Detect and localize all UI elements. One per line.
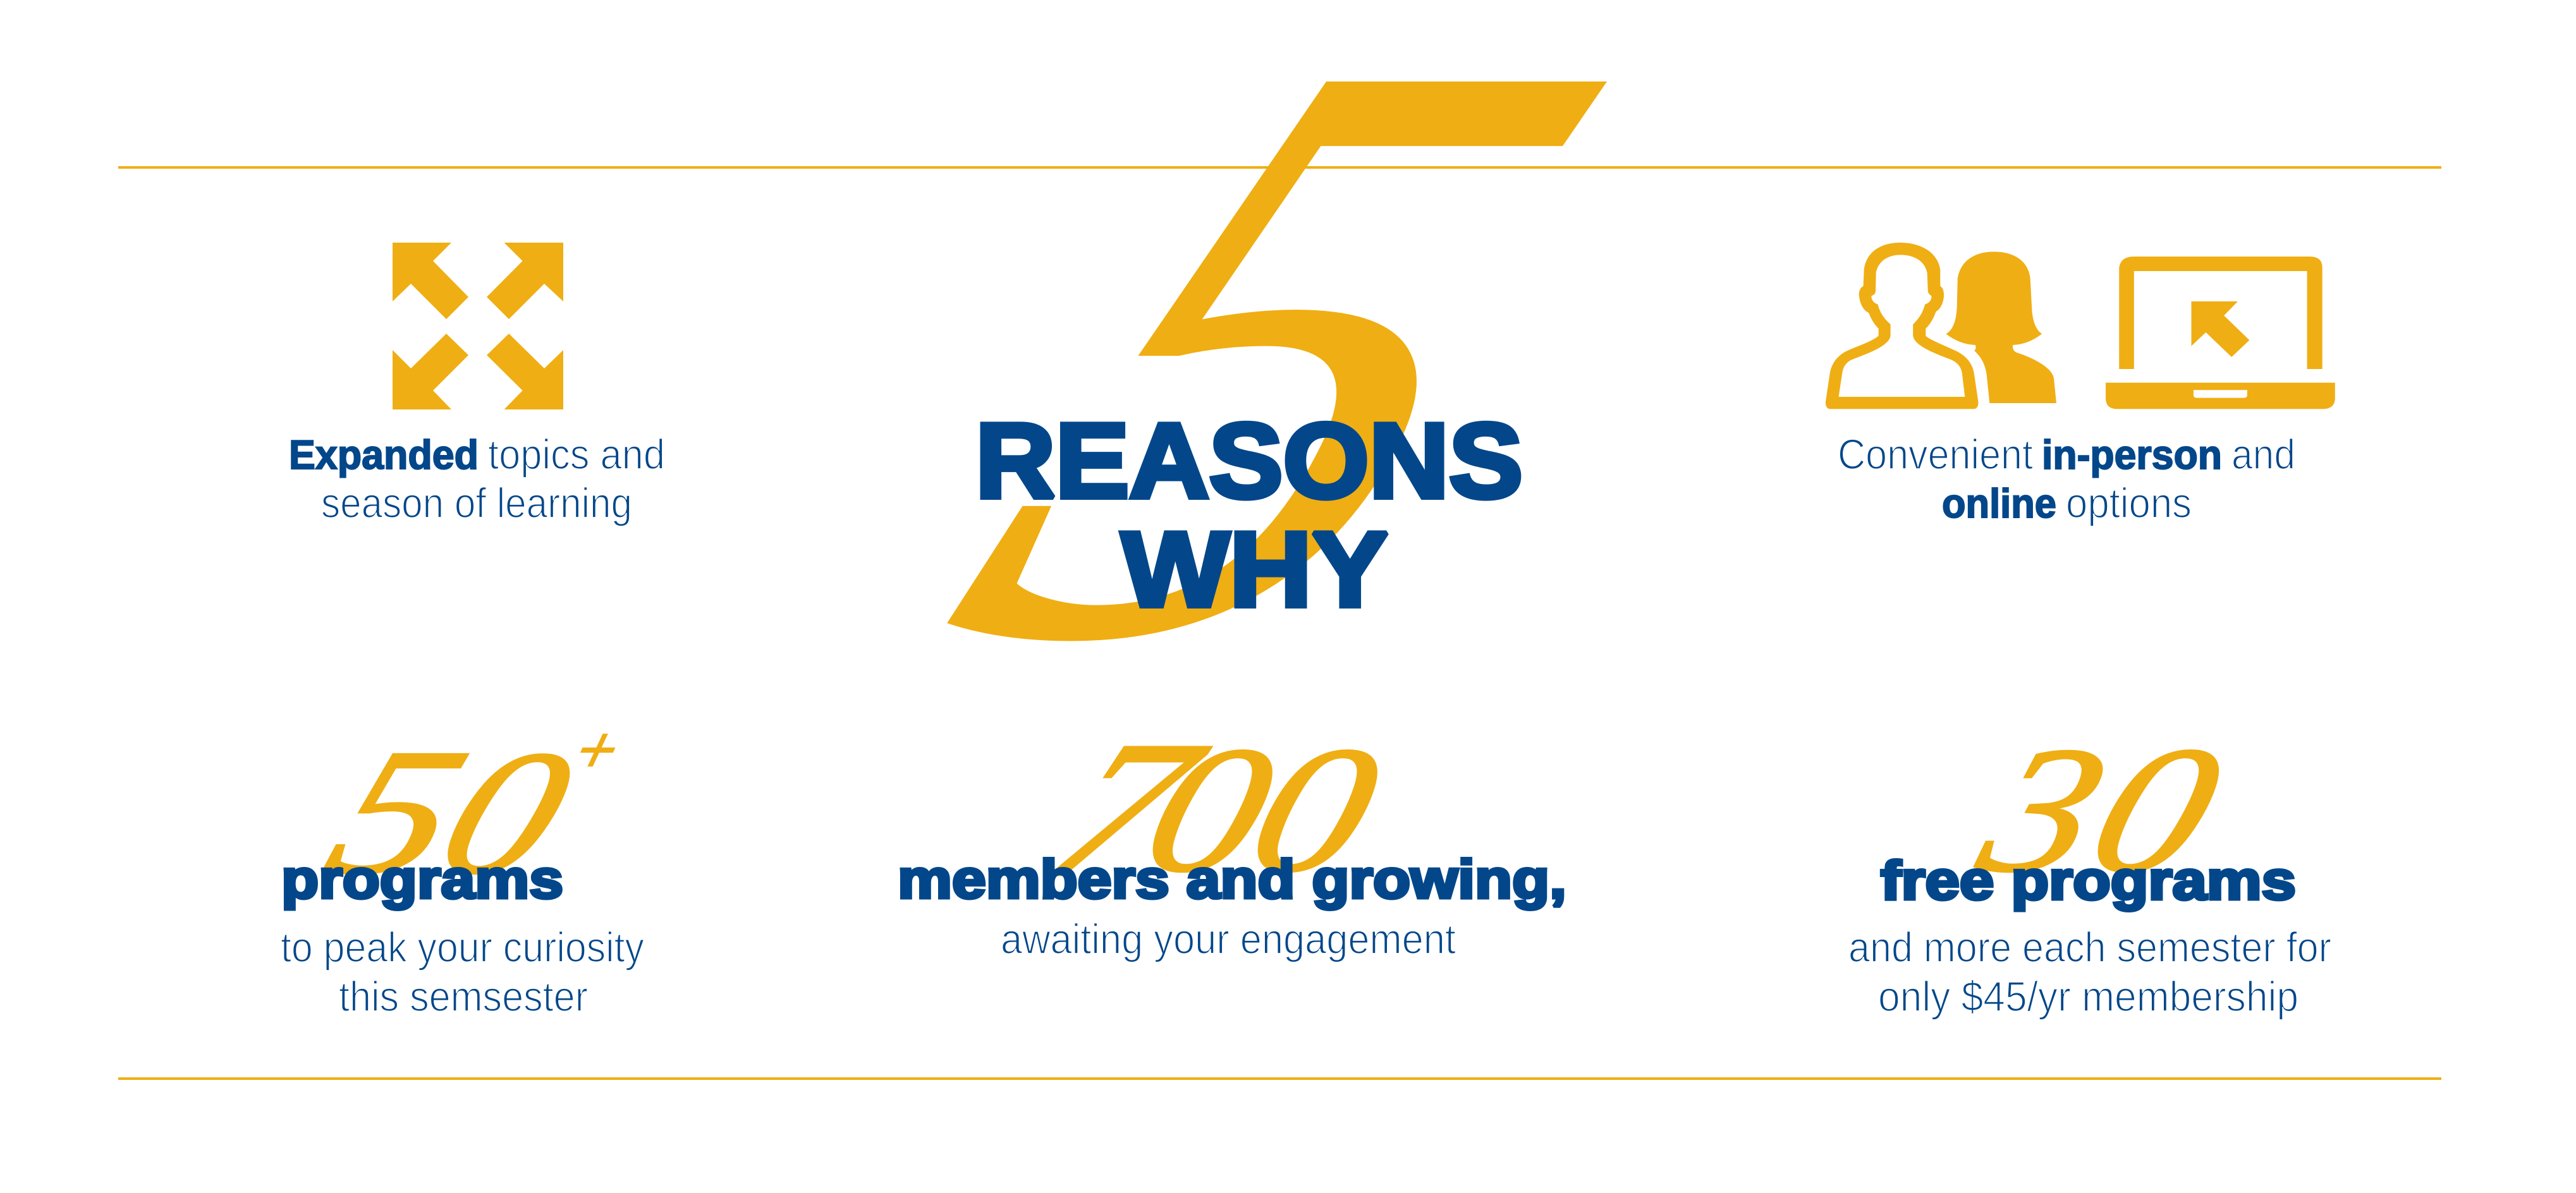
- text: and more each semester for only $45/yr membership: only $45/yr membership: [1878, 973, 2298, 1020]
- text: convenient in-person and online options: and: [2231, 431, 2295, 478]
- title: REASONS WHY: [975, 401, 1523, 629]
- heading: free programs: free programs: [1881, 851, 2296, 911]
- number: 30: [1958, 710, 2243, 909]
- title: REASONS WHY: REASONS: [975, 401, 1523, 520]
- number: 700: 0: [1231, 710, 1399, 909]
- icon: laptop with cursor: [2106, 257, 2335, 409]
- text: to peak your curiosity this semsester: to peak your curiosity: [281, 924, 644, 971]
- text: expanded topics and season of learning: [289, 431, 665, 527]
- text: convenient in-person and online options: in-person: [2042, 432, 2222, 478]
- number: 30: 0: [2070, 710, 2243, 909]
- panel: in-person and online options: [1826, 243, 2335, 527]
- number: 50+: 5: [305, 712, 491, 911]
- panel: 700 members: [898, 701, 1566, 963]
- icon: two people: [1826, 243, 2056, 409]
- text: convenient in-person and online options: [1838, 431, 2295, 527]
- text: convenient in-person and online options: options: [2066, 480, 2192, 527]
- panel: expanded topics: [289, 243, 665, 527]
- text: to peak your curiosity this semsester: this semsester: [339, 973, 588, 1020]
- number: 700: 7: [1017, 701, 1236, 917]
- icon: four outward arrows: [393, 243, 563, 409]
- text: expanded topics and season of learning: Expanded: [289, 432, 479, 478]
- heading: programs: programs: [281, 849, 563, 910]
- text: and more each semester for only $45/yr membership: and more each semester for: [1848, 924, 2331, 971]
- text: convenient in-person and online options: Convenient: [1838, 431, 2033, 478]
- panel: 30 free programs: [1848, 710, 2331, 1020]
- number: 700: [1017, 701, 1399, 917]
- title: REASONS WHY: WHY: [1121, 510, 1388, 629]
- text: expanded topics and season of learning: season of learning: [321, 480, 632, 527]
- text: and more each semester for only $45/yr membership: [1848, 924, 2331, 1020]
- text: awaiting your engagement: awaiting your engagement: [1001, 916, 1456, 963]
- number: 50+: [305, 712, 637, 911]
- text: to peak your curiosity this semsester: [281, 924, 644, 1020]
- text: convenient in-person and online options: online: [1942, 480, 2056, 526]
- heading: members and growing: members and growing,: [898, 849, 1566, 910]
- number: 700: 0: [1126, 710, 1294, 909]
- panel: 50+ programs: [281, 712, 644, 1020]
- number: 30: 3: [1958, 710, 2129, 909]
- number: 50+: +: [558, 713, 637, 787]
- text: expanded topics and season of learning: topics and: [488, 431, 665, 478]
- number: 50+: 0: [418, 714, 595, 911]
